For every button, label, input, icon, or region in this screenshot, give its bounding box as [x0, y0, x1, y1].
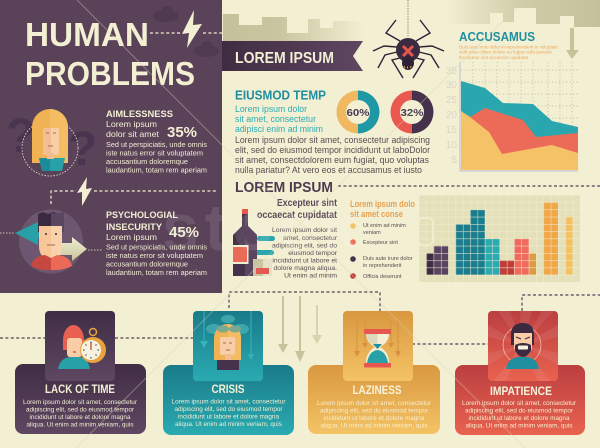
card: laziness — [308, 311, 440, 434]
card body text: aliqua. Ut enim ad minim veniam, quis — [26, 422, 134, 428]
text: aimlessness: accusantium doloremque — [106, 159, 188, 166]
legend: Lorem ipsum dolo — [350, 199, 415, 210]
text: psychological insecurity: 45% — [169, 224, 199, 241]
section: eiusmod temp text: adipisci enim ad minim — [235, 124, 323, 135]
arrows: three falling arrows — [278, 296, 322, 362]
icon: lower lightning with dashed connector — [51, 177, 218, 206]
card body text: Lorem ipsum dolor sit amet, consectetur — [23, 399, 137, 406]
text: psychological insecurity: iste natus error sit voluptatem — [106, 253, 203, 260]
icon: aimlessness avatar: ? — [6, 110, 35, 163]
panel: left dark panel — [0, 0, 222, 293]
text: excepteur sint: Excepteur sint — [277, 197, 337, 209]
icon: angry man with rays — [488, 311, 558, 381]
title — [25, 16, 195, 92]
card body text: adipiscing elit, sed do eiusmod tempor — [26, 406, 134, 414]
card: lack of time — [15, 311, 146, 434]
donut chart 60% — [336, 90, 380, 134]
text: excepteur sint — [257, 197, 338, 280]
area chart: 25 — [446, 95, 457, 106]
card body text: aliqua. Ut enim ad minim veniam, quis — [175, 421, 282, 428]
chart heading: accusamus: ACCUSAMUS — [459, 29, 535, 44]
banner heading: LOREM IPSUM — [235, 50, 334, 67]
icon: hourglass with arrows — [354, 320, 401, 368]
legend: sit amet conse — [350, 209, 403, 220]
text: excepteur sint: dolore magna aliqua. — [274, 265, 337, 272]
skyline right — [445, 0, 600, 27]
icon: psychological insecurity avatar — [0, 210, 102, 274]
title: PROBLEMS — [25, 55, 195, 92]
area chart: 20 — [446, 110, 457, 121]
section: eiusmod temp text: Lorem ipsum dolor — [235, 104, 307, 115]
area chart: 30 — [446, 80, 457, 91]
card body text — [462, 400, 576, 430]
card body text: incididunt ut labore et dolore magna — [30, 414, 131, 421]
title: HUMAN — [25, 16, 149, 53]
icon: spider — [373, 0, 444, 78]
arrow: top right down arrow — [566, 28, 579, 59]
donut chart 60%: 60% — [346, 108, 370, 119]
icon: person with stopwatch — [58, 325, 106, 369]
legend: veniam — [363, 230, 381, 236]
card body text: Lorem ipsum dolor sit amet, consectetur — [317, 400, 431, 407]
card body text: Lorem ipsum dolor sit amet, consectetur — [172, 398, 286, 406]
card body text: adipiscing elit, sed do eiusmod tempor — [174, 406, 282, 413]
bar chart: tile grid — [418, 195, 580, 282]
area chart — [446, 62, 578, 171]
text: psychological insecurity: Lorem ipsum — [106, 232, 157, 242]
watermark diagonal lines — [76, 0, 525, 448]
watermark: stock — [162, 190, 364, 264]
chart heading: accusamus: Excepteur sint occaecat cupidatat — [459, 55, 529, 60]
icon: bottle and glass — [232, 209, 275, 276]
icon: aimlessness avatar: ? — [68, 123, 97, 176]
text: psychological insecurity — [106, 210, 208, 277]
text: psychological insecurity: laudantium, totam rem aperiam — [106, 270, 207, 277]
text: psychological insecurity: accusantium doloremque — [106, 262, 188, 268]
card body text: adipiscing elit, sed do eiusmod tempor — [465, 408, 573, 414]
clouds — [153, 6, 219, 57]
chart heading: accusamus: Duis aute irure dolor in reprehenderit in voluptate — [459, 44, 558, 50]
donut chart 32%: 32% — [400, 108, 424, 119]
text: excepteur sint: adipiscing elit, sed do — [272, 242, 337, 250]
section: eiusmod temp text: sit amet, consectdolorem eum fugiat, quo voluptas — [235, 155, 429, 166]
legend: Officia deserunt — [363, 274, 402, 280]
text: aimlessness — [106, 109, 208, 174]
card: impatience — [455, 311, 585, 435]
text: aimlessness: AIMLESSNESS — [106, 109, 173, 119]
banner heading — [222, 41, 363, 71]
chart heading: accusamus — [459, 29, 558, 60]
section: eiusmod temp text: EIUSMOD TEMP — [235, 88, 326, 102]
text: excepteur sint: Lorem ipsum dolor sit — [272, 227, 337, 234]
card body text: adipiscing elit, sed do eiusmod tempor — [320, 408, 428, 414]
text: psychological insecurity: PSYCHOLOGIAL — [106, 210, 178, 221]
section: eiusmod temp text: nulla pariatur? At vero eos et accusamus et iusto — [235, 165, 422, 176]
section: eiusmod temp text: Lorem ipsum dolor sit amet, consectetur adipiscing — [235, 135, 430, 146]
card title: CRISIS — [212, 384, 245, 396]
text: aimlessness: Lorem ipsum — [106, 119, 157, 129]
card title: LAZINESS — [352, 385, 402, 397]
card body text: incididunt ut labore et dolore magna — [468, 415, 570, 422]
card body text — [172, 398, 286, 428]
icon: aimlessness avatar — [6, 109, 97, 176]
legend: Ut enim ad minim — [363, 223, 406, 229]
card: crisis — [163, 311, 294, 435]
card title: IMPATIENCE — [490, 386, 552, 398]
card body text: aliqua. Ut enim ad minim veniam, quis — [466, 422, 572, 430]
card body text: Lorem ipsum dolor sit amet, consectetur — [462, 400, 576, 407]
section: eiusmod temp text: sit amet, consectetur — [235, 114, 316, 125]
card title: LACK OF TIME — [45, 384, 115, 396]
card body text: aliqua. Ut enim ad minim veniam, quis — [320, 422, 428, 430]
text: aimlessness: dolor sit amet — [106, 129, 160, 139]
icon: top lightning with dashed line — [150, 10, 222, 48]
card body text — [317, 400, 431, 430]
icon: person under clouds and arrows — [200, 311, 254, 370]
section: eiusmod temp text — [235, 88, 430, 176]
text: aimlessness: iste natus error sit voluptatem — [106, 150, 203, 158]
section heading: lorem ipsum: LOREM IPSUM — [235, 179, 333, 196]
text: excepteur sint: amet, consectetur — [283, 235, 338, 242]
area chart: 15 — [446, 125, 457, 136]
text: aimlessness: Sed ut perspiciatis, unde omnis — [106, 142, 208, 149]
donut chart 32% — [390, 90, 434, 134]
skyline left — [223, 14, 365, 41]
area chart: 10 — [446, 140, 457, 151]
card body text — [23, 399, 137, 428]
legend: Duis aute irure dolor — [363, 256, 413, 262]
legend: in reprehenderit — [363, 263, 402, 269]
text: excepteur sint: occaecat cupidatat — [257, 209, 337, 221]
text: excepteur sint: incididunt ut labore et — [272, 258, 337, 264]
card body text: incididunt ut labore et dolore magna — [178, 414, 279, 420]
text: aimlessness: laudantium, totam rem aperiam — [106, 168, 207, 174]
text: psychological insecurity: Sed ut perspiciatis, unde omnis — [106, 244, 208, 252]
legend: Excepteur sint — [363, 240, 398, 246]
dashed connectors — [0, 292, 600, 344]
text: psychological insecurity: INSECURITY — [106, 222, 163, 233]
chart heading: accusamus: velit esse cillum dolore eu fugiat nulla pariatur — [459, 50, 552, 54]
section: eiusmod temp text: elit, sed do eiusmod tempor incididunt ut laboDolor — [235, 145, 430, 156]
text: excepteur sint: Ut enim ad minim — [284, 272, 337, 280]
legend — [350, 199, 415, 280]
area chart: 5 — [451, 155, 457, 166]
text: excepteur sint: eiusmod tempor — [288, 250, 338, 257]
area chart: 35 — [446, 66, 457, 77]
card body text: incididunt ut labore et dolore magna — [324, 415, 425, 422]
text: aimlessness: 35% — [167, 124, 197, 141]
